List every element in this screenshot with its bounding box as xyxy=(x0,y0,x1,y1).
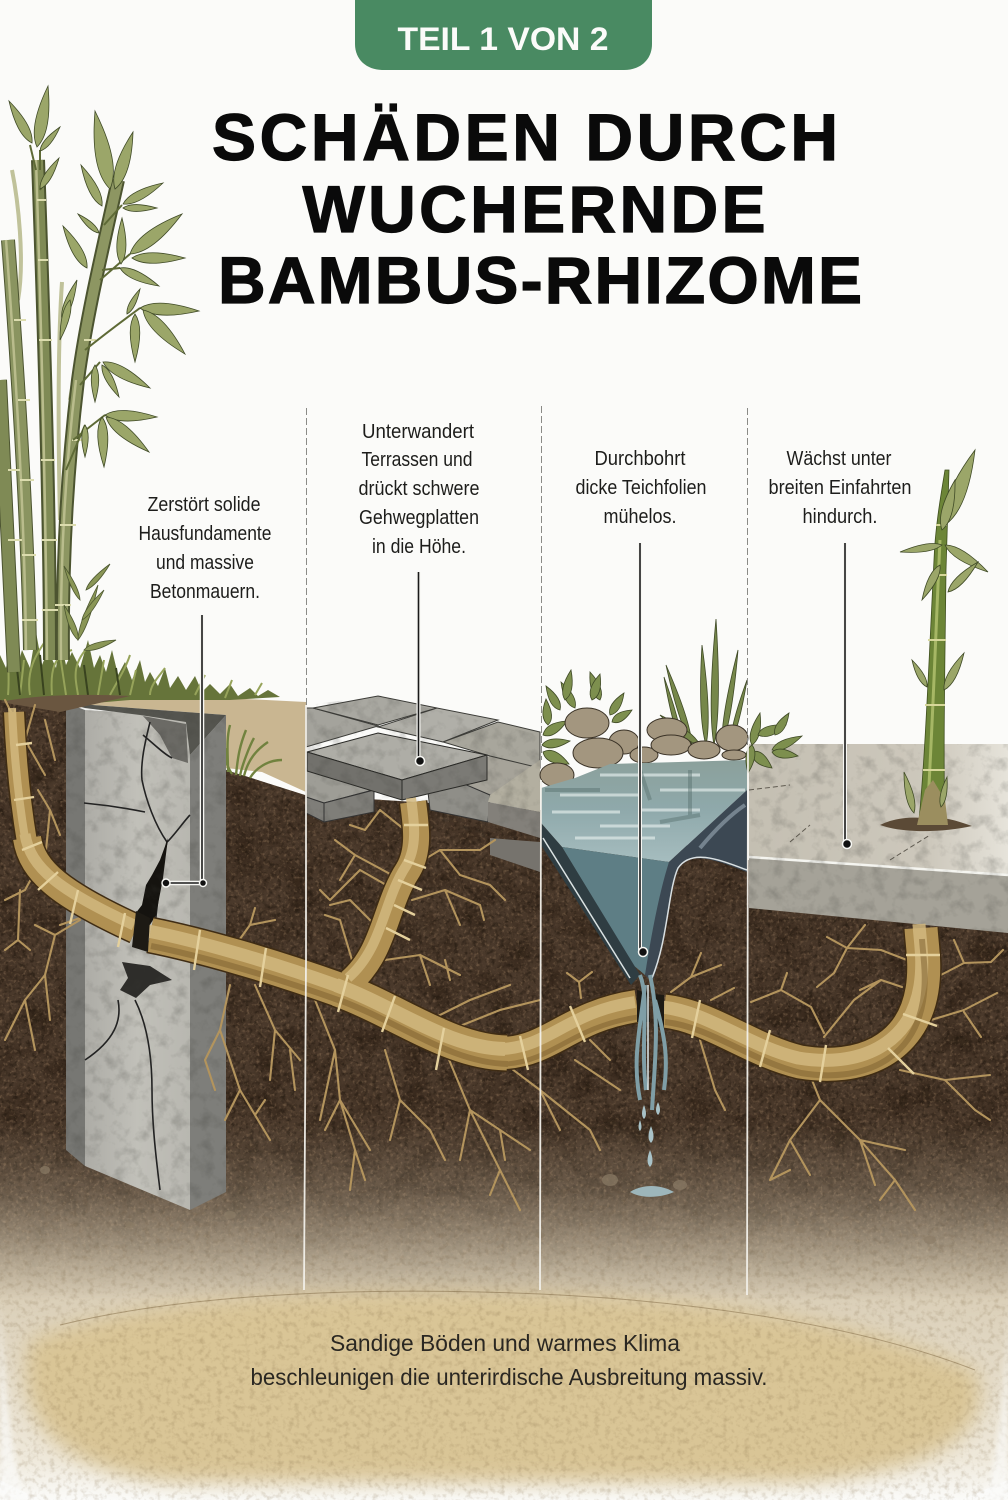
rhizome highlight xyxy=(12,708,922,1060)
far right paving xyxy=(443,722,540,768)
concrete cracks xyxy=(84,722,190,1190)
paving base filling behind stones xyxy=(430,733,540,812)
callout leader: driveway xyxy=(842,543,852,848)
bush beside the slab xyxy=(744,711,804,774)
label: terraces: Unterwandert xyxy=(362,420,474,443)
punctured pond liner xyxy=(541,790,747,985)
part tab xyxy=(355,0,652,70)
label: driveways: breiten Einfahrten xyxy=(768,476,912,499)
label: driveways: Wächst unter xyxy=(786,447,892,470)
pebbles at the soil transition xyxy=(40,1166,936,1244)
callout leader: paving xyxy=(416,572,424,766)
sandy ground band at the bottom xyxy=(0,1100,1008,1500)
back paver xyxy=(313,696,437,725)
bamboo leaves xyxy=(5,85,199,467)
concrete driveway slab xyxy=(749,744,1008,933)
rhizome outline xyxy=(14,712,924,1064)
concrete foundation pillar xyxy=(66,703,226,1210)
stalks xyxy=(0,380,14,672)
label: foundations: Zerstört solide xyxy=(148,493,260,516)
grain on concrete surfaces xyxy=(66,698,1008,1206)
thin pale stems xyxy=(12,170,100,520)
underground soil cross-section xyxy=(0,690,1008,1320)
label: terraces: drückt schwere xyxy=(358,477,480,500)
young bamboo shoot breaking through the slab xyxy=(880,447,990,831)
left grass bank xyxy=(0,632,280,712)
callout leader: foundation xyxy=(162,615,206,887)
rootlets xyxy=(5,700,1003,1210)
title: BAMBUS-RHIZOME xyxy=(218,243,862,317)
label: foundations: Hausfundamente xyxy=(138,522,272,545)
label: terraces: Gehwegplatten xyxy=(359,506,479,529)
small grass tuft beside the pillar xyxy=(225,725,282,778)
pillar right face xyxy=(190,715,226,1210)
callout leader: pond liner xyxy=(638,543,648,956)
sandy terrain surface behind the pillar xyxy=(60,692,306,792)
rhizome body xyxy=(14,712,924,1064)
label: terraces xyxy=(358,420,480,558)
bottom note: Sandige Böden und warmes Klima xyxy=(330,1330,680,1356)
left bamboo grove xyxy=(0,85,199,672)
bottom note xyxy=(250,1330,768,1390)
label: pond liners xyxy=(576,447,706,528)
stalk outlines xyxy=(0,160,118,672)
slab front face xyxy=(749,857,1008,933)
beige paving edge xyxy=(488,760,540,812)
back paver right xyxy=(378,708,498,742)
rhizome tips at the breakthrough xyxy=(132,911,150,952)
pond background plants xyxy=(541,619,749,769)
label: pond liners: mühelos. xyxy=(604,505,676,528)
pillar left face xyxy=(66,703,85,1166)
small grass bamboo xyxy=(61,563,117,653)
pillar front face xyxy=(85,710,190,1210)
label: driveways xyxy=(768,447,912,528)
label: foundations: und massive xyxy=(156,551,254,574)
label: foundations: Betonmauern. xyxy=(150,580,260,603)
rhizome nodes xyxy=(14,743,940,1082)
title xyxy=(212,100,862,317)
label: foundations xyxy=(138,493,272,603)
lower left paver xyxy=(306,768,373,803)
label: pond liners: dicke Teichfolien xyxy=(576,476,706,499)
label: pond liners: Durchbohrt xyxy=(594,447,686,470)
pond water surface xyxy=(541,760,747,862)
part tab: TEIL 1 VON 2 xyxy=(398,21,608,57)
lower right paver xyxy=(428,780,490,822)
slab top surface xyxy=(749,744,1008,875)
pillar top surface xyxy=(66,703,226,755)
bamboo rhizome xyxy=(12,708,940,1082)
terrace paving stones xyxy=(306,696,540,872)
pond rocks xyxy=(540,708,748,787)
rhizome shadow xyxy=(151,939,925,1075)
bottom note: beschleunigen die unterirdische Ausbreitung massiv. xyxy=(250,1364,768,1390)
label: terraces: Terrassen und xyxy=(362,448,472,471)
stalk nodes xyxy=(8,200,96,620)
title: SCHÄDEN DURCH xyxy=(212,100,838,174)
water seen in the pond cross-section xyxy=(562,847,669,975)
lifted main paving slab xyxy=(307,733,487,780)
branches xyxy=(30,145,140,470)
label: driveways: hindurch. xyxy=(802,505,878,528)
section divider lines xyxy=(304,406,748,1295)
label: terraces: in die Höhe. xyxy=(372,535,466,558)
title: WUCHERNDE xyxy=(302,172,766,246)
water leaking through the soil xyxy=(630,975,674,1197)
back paver left xyxy=(306,708,378,747)
